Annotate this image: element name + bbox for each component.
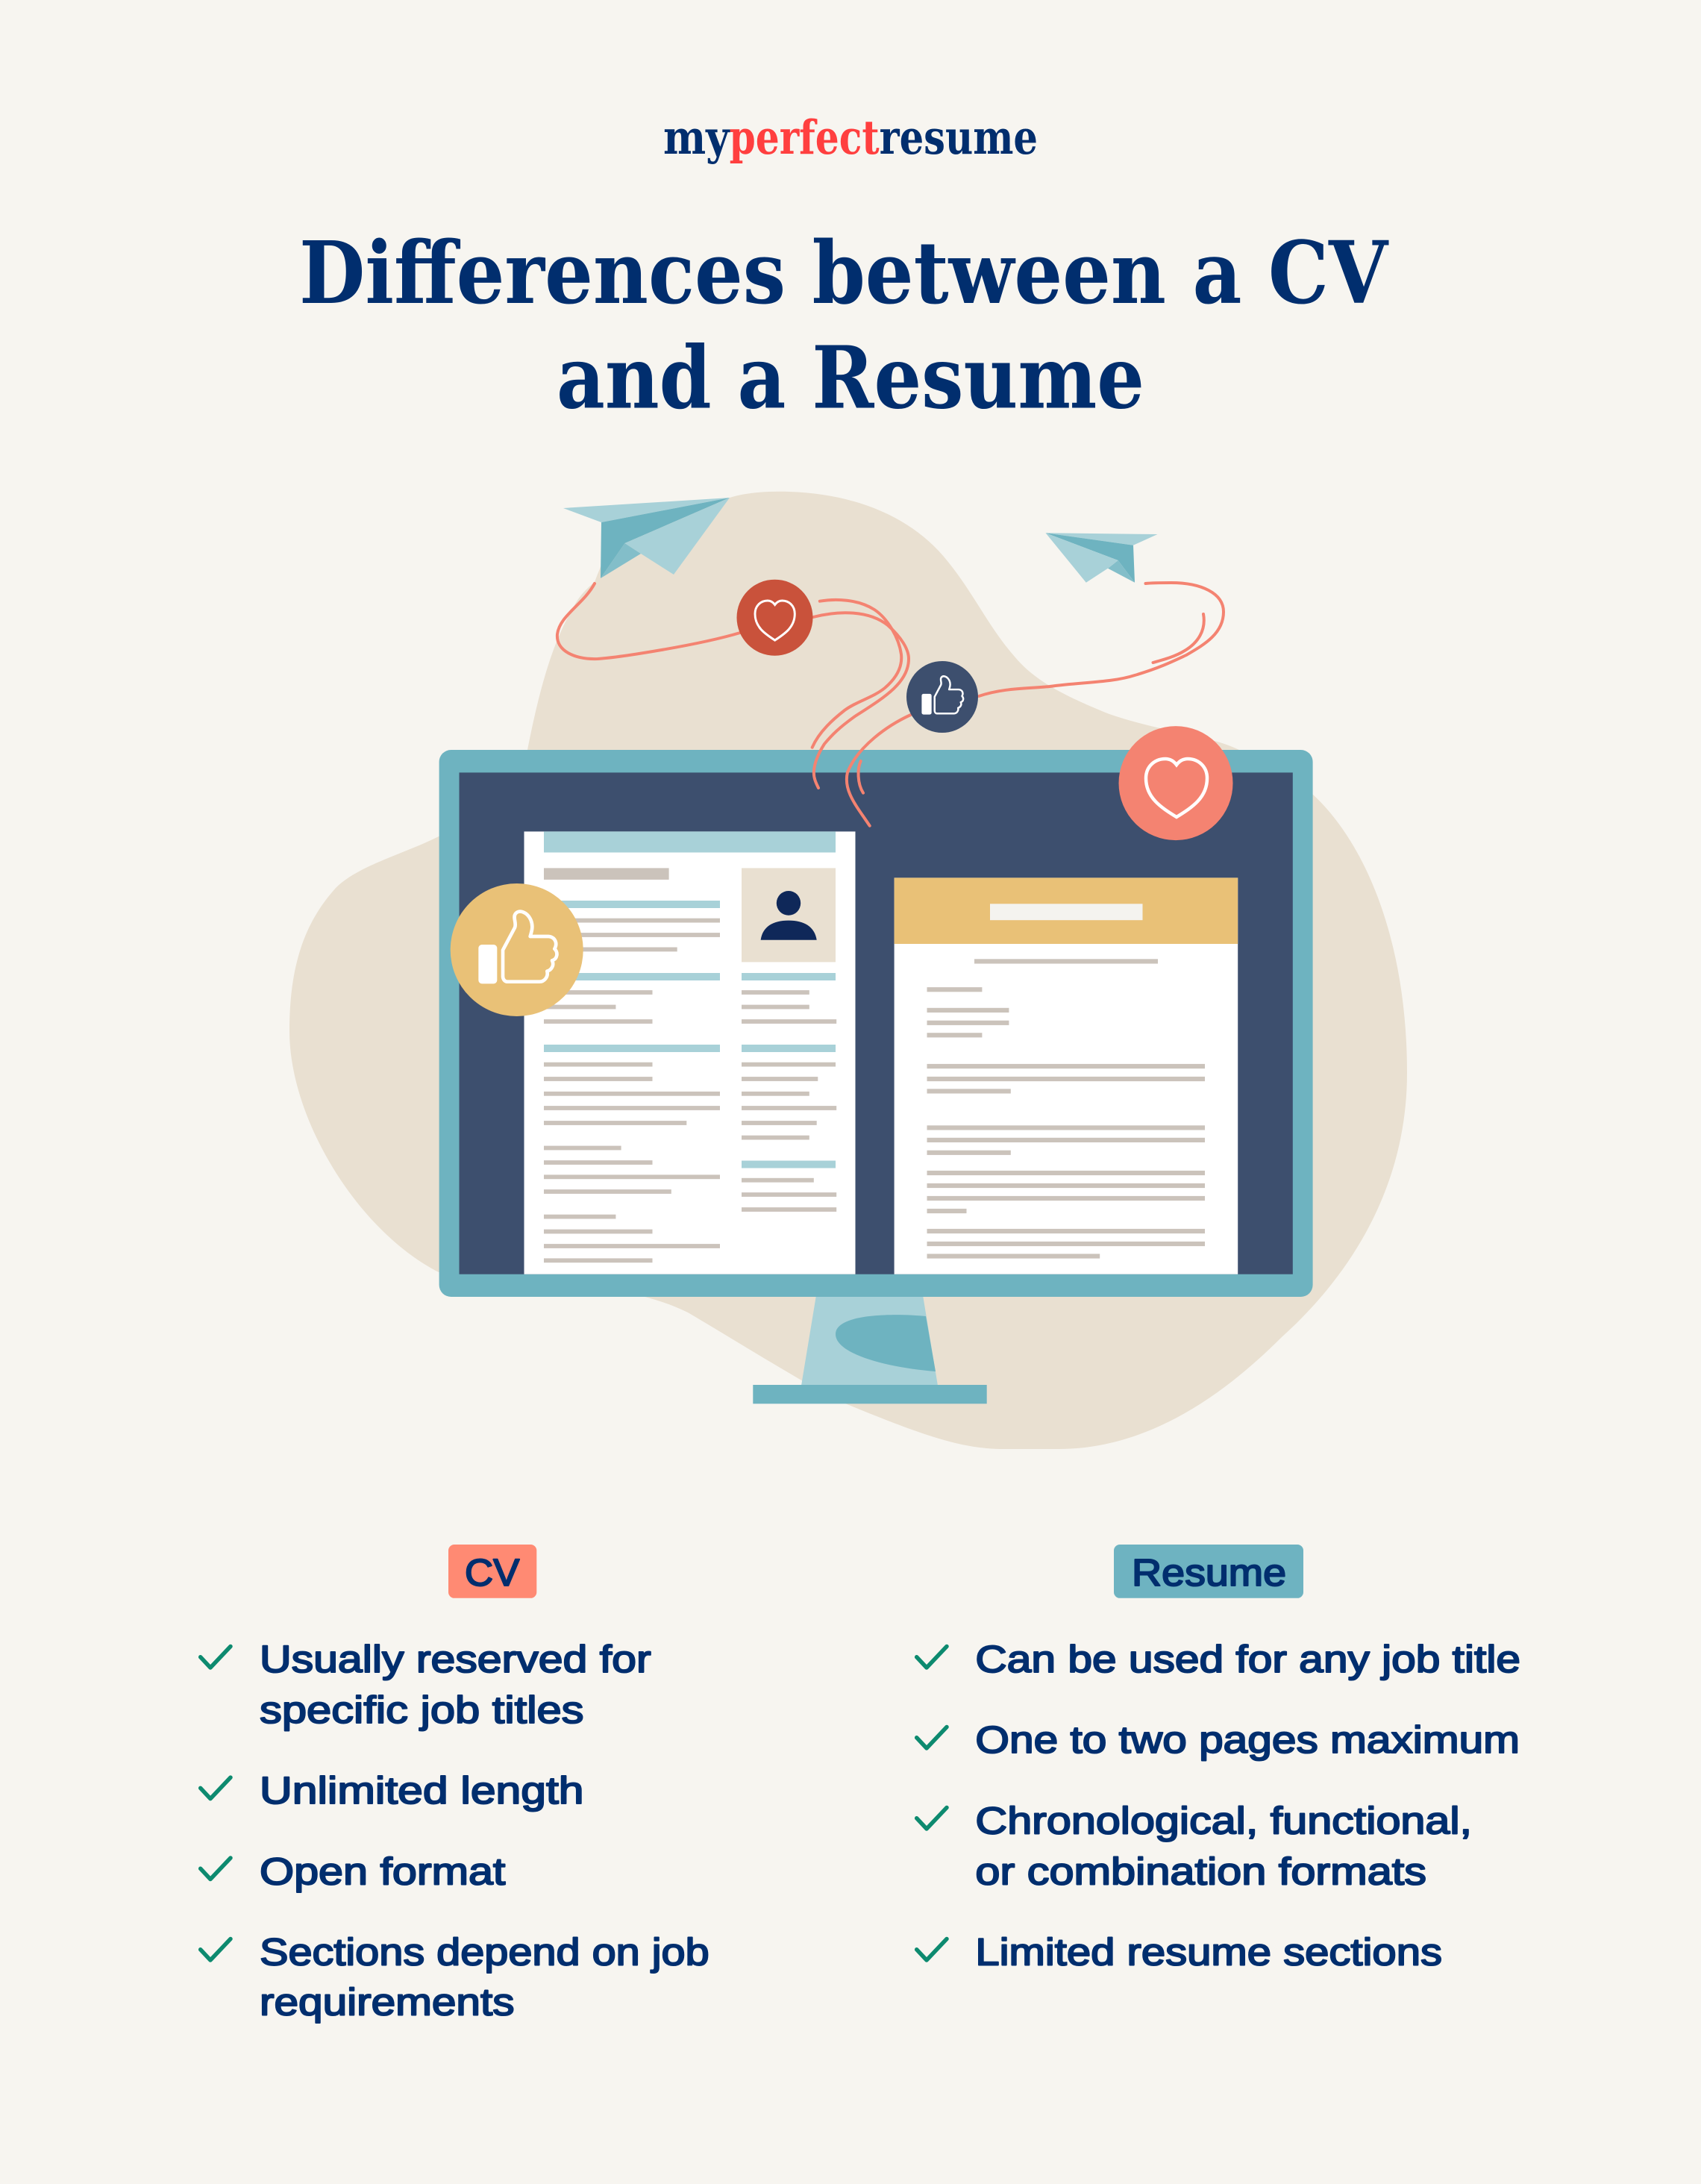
check item: reserved	[201, 1638, 651, 1731]
badge: Resume: Resume	[1132, 1551, 1286, 1594]
document: resume	[895, 877, 1238, 1274]
check item: pages: One to two pages maximum	[975, 1718, 1520, 1761]
check item: format	[201, 1850, 505, 1893]
check item: sections: Sections depend on job	[260, 1931, 709, 1974]
title: Differences between a CV	[299, 223, 1389, 324]
check item: reserved: specific job titles	[260, 1689, 583, 1731]
badge: CV: CV	[465, 1551, 519, 1594]
icon: navy thumbs-up badge	[906, 661, 978, 733]
background blob	[289, 492, 1407, 1449]
illustration: computer showing a CV and a resume	[289, 492, 1407, 1449]
document: CV	[524, 831, 855, 1274]
check item: limited sections: Limited resume sections	[975, 1931, 1442, 1974]
title	[299, 223, 1389, 429]
check item: formats	[917, 1799, 1472, 1893]
logo: myperfectresume: my	[663, 110, 731, 165]
logo: myperfectresume: resume	[880, 110, 1038, 165]
icon: red heart badge	[737, 580, 813, 656]
check item: format: Open format	[260, 1850, 505, 1893]
monitor stand	[753, 1295, 987, 1404]
check item: formats: or combination formats	[975, 1850, 1426, 1893]
panel: Resume list	[917, 1545, 1520, 1974]
logo: myperfectresume	[663, 110, 1038, 165]
check item: length: Unlimited length	[260, 1769, 583, 1812]
icon: large paper plane	[563, 498, 730, 578]
icon: profile photo	[742, 868, 836, 962]
logo: myperfectresume: perfect	[730, 110, 880, 165]
title: and a Resume	[557, 328, 1144, 429]
badge: CV	[448, 1545, 536, 1598]
panel: CV list	[201, 1545, 709, 2024]
badge: Resume	[1114, 1545, 1303, 1598]
monitor frame and screen	[439, 750, 1313, 1297]
flight path lines	[557, 583, 1224, 826]
icon: small paper plane	[1046, 533, 1158, 583]
icon: salmon heart badge	[1119, 726, 1232, 840]
check item: sections	[201, 1931, 709, 2024]
check item: formats: Chronological, functional,	[975, 1799, 1472, 1842]
check item: reserved: Usually reserved for	[260, 1638, 651, 1680]
check item: any job title: Can be used for any job title	[975, 1638, 1520, 1680]
icon: yellow thumbs-up badge	[451, 883, 583, 1016]
check item: sections: requirements	[260, 1981, 515, 2024]
